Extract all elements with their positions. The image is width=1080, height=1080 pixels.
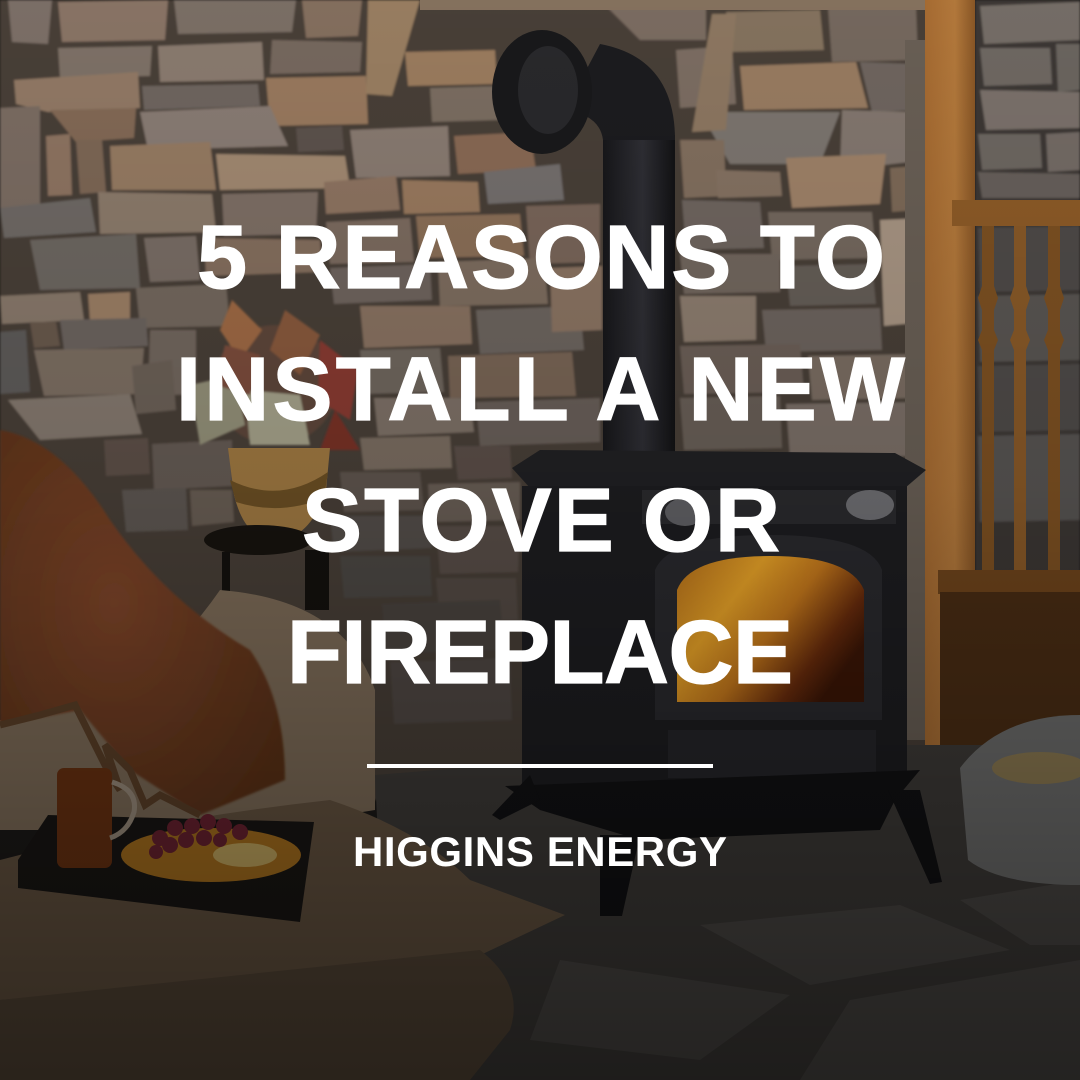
- stone edge by post: [905, 40, 927, 740]
- wooden stair base: [938, 570, 1080, 747]
- stove legs: [492, 775, 942, 916]
- side table: [204, 525, 329, 612]
- ash panel: [668, 730, 876, 778]
- wooden post: [925, 0, 975, 745]
- right stone wall: [975, 0, 1080, 580]
- title: [176, 208, 905, 703]
- chimney beam at top of wall: [420, 0, 930, 10]
- pellet bucket: [960, 715, 1080, 885]
- decorative band: [642, 490, 896, 526]
- fire window: [677, 556, 864, 702]
- title: INSTALL A NEW: [176, 340, 905, 440]
- title: 5 REASONS TO: [197, 208, 885, 308]
- wood stove: [492, 450, 942, 916]
- orange blanket: [0, 430, 285, 815]
- stove body: [522, 486, 907, 786]
- stove door: [655, 535, 882, 720]
- stove pipe: [492, 30, 675, 455]
- title: FIREPLACE: [287, 603, 793, 703]
- tray: [18, 815, 314, 922]
- divider line: [367, 764, 713, 768]
- title: STOVE OR: [302, 471, 780, 571]
- cushion: [0, 800, 565, 1000]
- armchair: [0, 590, 375, 830]
- plate with snacks: [121, 814, 301, 882]
- flagstones: [530, 880, 1080, 1080]
- flower arrangement: [190, 300, 360, 450]
- lower cushion: [0, 950, 514, 1080]
- stove base: [505, 770, 920, 840]
- blanket fringe: [0, 705, 200, 815]
- glass of amber drink: [57, 768, 135, 868]
- stair railing: [952, 200, 1080, 590]
- vase: [228, 448, 330, 540]
- stone wall: [0, 0, 930, 800]
- grapes: [149, 814, 248, 859]
- brand name: HIGGINS ENERGY: [353, 828, 727, 875]
- stove top: [512, 450, 926, 488]
- floor: [0, 745, 1080, 1080]
